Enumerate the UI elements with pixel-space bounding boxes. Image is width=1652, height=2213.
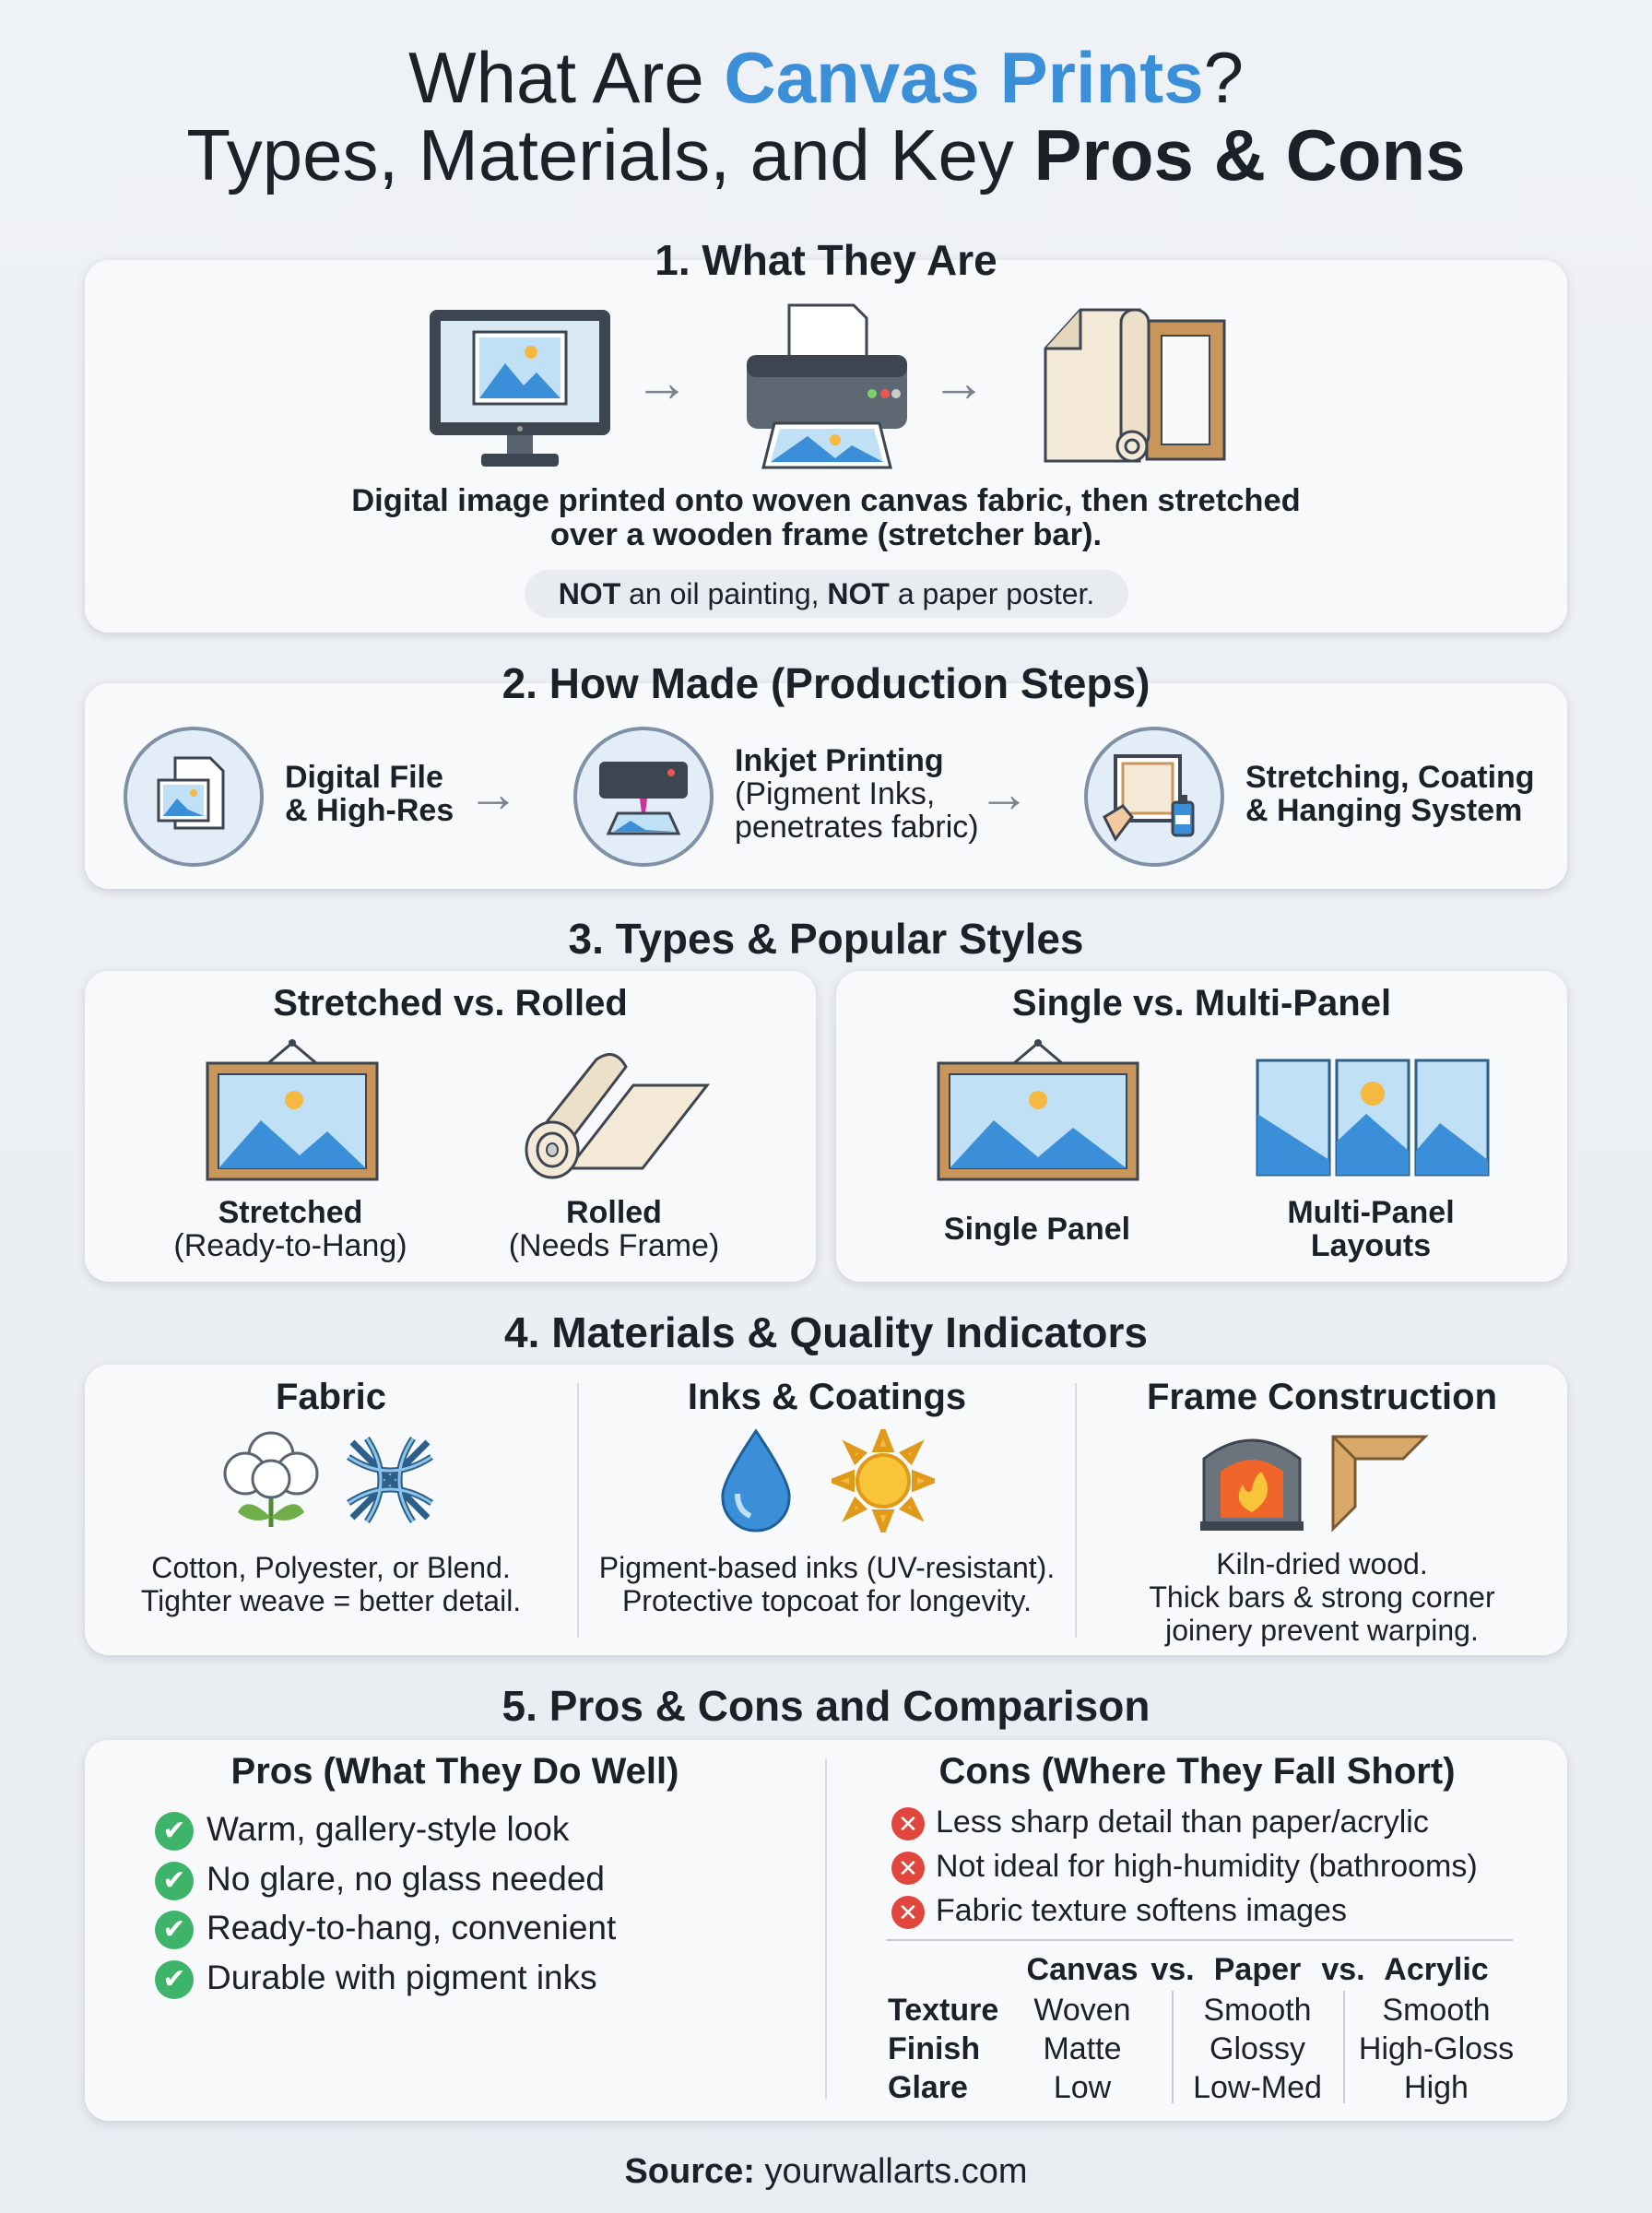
- column: frame: Frame Construction: [1147, 1377, 1497, 1417]
- label: stretched: Stretched: [218, 1195, 362, 1230]
- icon: multi panel: [1256, 1059, 1490, 1177]
- icon: digital file: [124, 727, 264, 867]
- text: inkjet: (Pigment Inks,: [735, 776, 935, 811]
- text: inkjet: [735, 743, 979, 845]
- list: pros: ✔: [162, 1914, 186, 1945]
- text: stretching: [1245, 760, 1535, 828]
- list: pros: ✔: [162, 1816, 186, 1846]
- panel: what they are: [85, 260, 1567, 633]
- list: cons: ✕: [898, 1899, 918, 1926]
- icon: printer: [747, 304, 907, 468]
- panel: single vs multi: [836, 971, 1567, 1282]
- text: description: [351, 483, 1301, 552]
- text: digital file: [285, 760, 454, 828]
- source: Source: yourwallarts.com: [624, 2152, 1028, 2191]
- table: comparison: Finish: [888, 2031, 980, 2066]
- table: comparison: Texture: [888, 1993, 998, 2028]
- label: rolled: Rolled: [566, 1195, 662, 1230]
- heading: section 3: 3. Types & Popular Styles: [568, 915, 1084, 963]
- arrow: →: [978, 764, 1030, 822]
- icon: weave: [347, 1437, 433, 1523]
- label: stretched: [173, 1195, 407, 1263]
- title: What Are Canvas Prints?: [408, 37, 1244, 118]
- column: frame: [1147, 1377, 1497, 1647]
- list: pros: ✔: [162, 1964, 186, 1994]
- icon: sun: [832, 1429, 935, 1533]
- heading: section 4: 4. Materials & Quality Indicators: [504, 1308, 1148, 1356]
- column: frame: Kiln-dried wood.: [1216, 1547, 1428, 1580]
- table: comparison: Low-Med: [1193, 2070, 1322, 2105]
- list: pros: ✔: [162, 1865, 186, 1896]
- icon: inkjet: [573, 727, 714, 867]
- text: description: over a wooden frame (stretcher bar).: [550, 517, 1102, 552]
- icon: rolled canvas: [525, 1053, 710, 1178]
- heading: section 5: 5. Pros & Cons and Comparison: [502, 1682, 1150, 1730]
- label: stretched: (Ready-to-Hang): [173, 1228, 407, 1263]
- text: inkjet: Inkjet Printing: [735, 743, 944, 778]
- arrow: →: [467, 764, 519, 822]
- list: cons: Not ideal for high-humidity (bathrooms): [936, 1849, 1478, 1884]
- column: inks: Pigment-based inks (UV-resistant).: [599, 1551, 1055, 1584]
- label: multi panel: [1287, 1195, 1455, 1263]
- icon: canvas and frame: [1044, 308, 1226, 463]
- panel: how made: [85, 683, 1567, 889]
- table: comparison: Smooth: [1382, 1993, 1491, 2028]
- label: multi panel: Layouts: [1311, 1228, 1431, 1263]
- icon: single panel: [937, 1039, 1139, 1180]
- list: pros: Durable with pigment inks: [206, 1959, 597, 1996]
- table: comparison: High: [1404, 2070, 1469, 2105]
- text: stretching: & Hanging System: [1245, 793, 1522, 828]
- table: comparison: Canvas: [1027, 1952, 1138, 1987]
- label: multi panel: Multi-Panel: [1287, 1195, 1455, 1230]
- callout: not oil painting: NOT an oil painting, NOT a paper poster.: [559, 577, 1094, 610]
- list: pros: Warm, gallery-style look: [206, 1810, 569, 1848]
- table: comparison: High-Gloss: [1359, 2031, 1514, 2066]
- list: pros: [155, 1810, 616, 1999]
- heading: section 2: 2. How Made (Production Steps): [502, 659, 1150, 707]
- icon: stretching: [1084, 727, 1224, 867]
- title: [186, 37, 1466, 195]
- cons: Cons (Where They Fall Short): [938, 1751, 1456, 1792]
- icon: stretched frame: [206, 1039, 378, 1180]
- table: comparison: Low: [1054, 2070, 1111, 2105]
- text: inkjet: penetrates fabric): [735, 810, 979, 845]
- icon: drop: [721, 1429, 791, 1533]
- callout: not oil painting: [525, 570, 1128, 618]
- table: comparison: Smooth: [1203, 1993, 1312, 2028]
- column: inks: Protective topcoat for longevity.: [622, 1584, 1032, 1617]
- arrow: →: [634, 351, 690, 413]
- list: pros: Ready-to-hang, convenient: [206, 1909, 616, 1947]
- text: digital file: Digital File: [285, 760, 443, 795]
- list: cons: [891, 1805, 1478, 1929]
- table: comparison: Glare: [888, 2070, 968, 2105]
- text: description: Digital image printed onto woven canvas fabric, then stretched: [351, 483, 1301, 518]
- label: rolled: (Needs Frame): [509, 1228, 719, 1263]
- list: cons: ✕: [898, 1854, 918, 1882]
- subheading: Stretched vs. Rolled: [273, 983, 628, 1024]
- pros: Pros (What They Do Well): [231, 1751, 678, 1792]
- list: pros: No glare, no glass needed: [206, 1860, 605, 1898]
- column: fabric: Cotton, Polyester, or Blend.: [151, 1551, 511, 1584]
- panel: materials: [85, 1365, 1567, 1655]
- subheading: Single vs. Multi-Panel: [1012, 983, 1391, 1024]
- table: comparison: Paper: [1214, 1952, 1301, 1987]
- table: comparison: vs.: [1321, 1952, 1365, 1987]
- panel: stretched vs rolled: [85, 971, 816, 1282]
- icon: kiln: [1200, 1438, 1304, 1531]
- list: cons: Less sharp detail than paper/acrylic: [936, 1805, 1429, 1840]
- text: stretching: Stretching, Coating: [1245, 760, 1535, 795]
- arrow: →: [931, 351, 986, 413]
- icon: monitor: [430, 310, 610, 467]
- pros: [155, 1751, 678, 1999]
- column: frame: Thick bars & strong corner: [1149, 1580, 1495, 1614]
- title: Types, Materials, and Key Pros & Cons: [186, 114, 1466, 195]
- table: comparison: Matte: [1043, 2031, 1122, 2066]
- label: single panel: Single Panel: [944, 1212, 1130, 1247]
- label: rolled: [509, 1195, 719, 1263]
- column: fabric: [141, 1377, 521, 1617]
- text: digital file: & High-Res: [285, 793, 454, 828]
- column: inks: Inks & Coatings: [688, 1377, 966, 1417]
- panel: pros and cons: [85, 1740, 1567, 2121]
- table: comparison: Glossy: [1210, 2031, 1305, 2066]
- column: inks: [599, 1377, 1055, 1617]
- icon: corner: [1331, 1435, 1429, 1533]
- table: comparison: Woven: [1033, 1993, 1131, 2028]
- list: cons: Fabric texture softens images: [936, 1893, 1347, 1928]
- column: fabric: Tighter weave = better detail.: [141, 1584, 521, 1617]
- icon: cotton: [223, 1431, 319, 1527]
- list: cons: ✕: [898, 1810, 918, 1838]
- table: comparison: Acrylic: [1384, 1952, 1489, 1987]
- heading: section 1: 1. What They Are: [655, 236, 997, 284]
- column: frame: joinery prevent warping.: [1165, 1614, 1479, 1647]
- column: fabric: Fabric: [276, 1377, 386, 1417]
- table: comparison: [888, 1952, 1514, 2105]
- cons: [886, 1751, 1514, 2105]
- table: comparison: vs.: [1150, 1952, 1195, 1987]
